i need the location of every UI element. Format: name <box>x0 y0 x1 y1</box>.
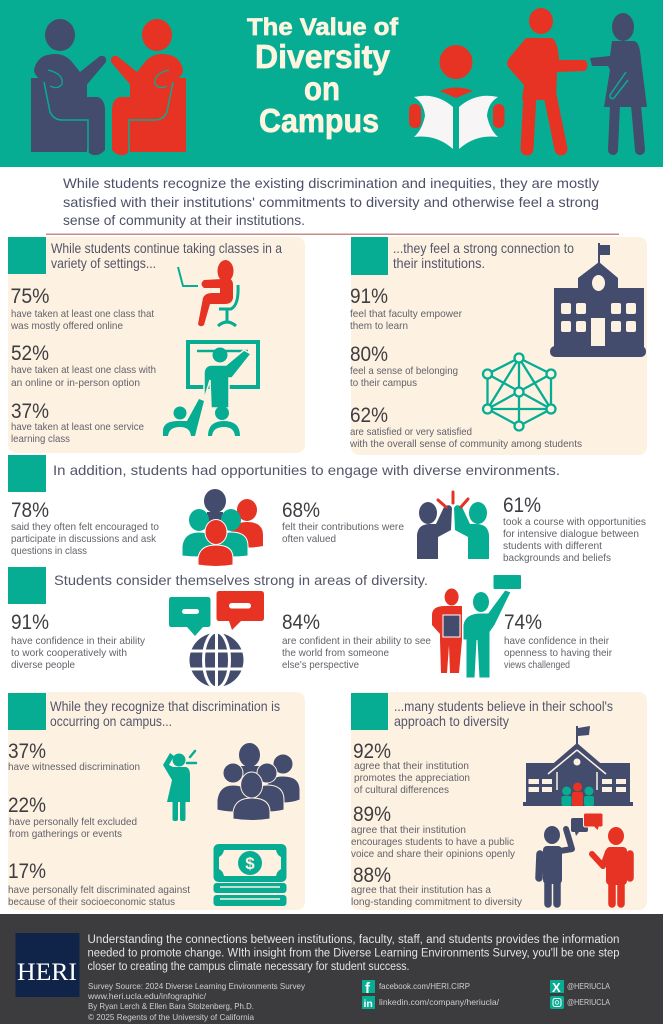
footer message <box>88 934 620 973</box>
intro text <box>63 175 599 228</box>
icon: two seated people talking <box>31 19 186 155</box>
panel heading: their institutions. <box>393 255 485 271</box>
stat: 84% <box>282 611 431 671</box>
stat: 37% <box>8 740 140 773</box>
intro text: While students recognize the existing discrimination and inequities, they are mostly <box>63 175 599 191</box>
source credits <box>87 981 306 1022</box>
stat: 91% <box>350 285 462 332</box>
icon: crowd of people <box>217 742 300 820</box>
stat: 78%: said they often felt encouraged to <box>11 521 159 533</box>
intro text: satisfied with their institutions' commitments to diversity and otherwise feel a strong <box>63 194 599 210</box>
stat: 22%: 22% <box>8 794 46 817</box>
stat: 75%: have taken at least one class that <box>11 308 154 320</box>
stat: 92% <box>353 740 470 796</box>
stat: 62%: are satisfied or very satisfied <box>350 426 472 438</box>
stat: 37% <box>11 400 144 445</box>
panel heading: While students continue taking classes in a <box>51 240 282 256</box>
panel: approach to diversity <box>351 692 647 910</box>
stat: 75% <box>10 285 154 332</box>
icon: woman witnessing <box>163 751 196 821</box>
section heading: Students consider themselves strong in areas of diversity. <box>54 572 428 588</box>
social: linkedin <box>362 996 500 1010</box>
footer message: needed to promote change. WIth insight from the Diverse Learning Environments Survey, you'll be one step <box>88 948 620 960</box>
stat: 74%: have confidence in their <box>504 635 609 647</box>
icon: group of people <box>182 489 263 566</box>
stat: 61% <box>503 494 646 564</box>
icon: stack of money: $ <box>245 854 255 873</box>
stat: 80% <box>350 343 458 389</box>
social: facebook <box>362 980 470 997</box>
stat: 68%: often valued <box>282 533 336 545</box>
icon: speech bubbles and globe <box>169 591 264 688</box>
footer message: closer to creating the campus climate necessary for student success. <box>88 961 410 973</box>
stat: 74%: 74% <box>504 611 542 634</box>
social: X: X <box>552 980 561 995</box>
stat: 89%: encourages students to have a public <box>351 836 514 848</box>
stat: 78%: questions in class <box>11 545 87 557</box>
stat: 17% <box>8 860 190 908</box>
stat: 22%: from gatherings or events <box>9 828 122 840</box>
icon: school with students <box>523 726 633 806</box>
social: facebook: facebook.com/HERI.CIRP <box>379 981 470 991</box>
footer <box>0 914 663 1024</box>
stat: 68% <box>282 499 404 545</box>
social: linkedin: in <box>364 998 373 1010</box>
stat: 89% <box>351 803 516 860</box>
icon: man and woman shaking hands <box>507 8 647 150</box>
icon: two people with sign <box>432 575 521 678</box>
stat: 78% <box>11 499 159 557</box>
stat: 89%: 89% <box>353 803 391 826</box>
stat: 91%: diverse people <box>11 659 75 671</box>
stat: 68%: felt their contributions were <box>282 521 404 533</box>
stat: 61%: backgrounds and beliefs <box>503 552 611 564</box>
panel heading <box>50 698 280 729</box>
stat: 92%: 92% <box>353 740 391 763</box>
panel heading: approach to diversity <box>394 713 509 729</box>
panel heading: While they recognize that discrimination is <box>50 698 280 714</box>
stat: 74%: openness to having their <box>504 647 612 659</box>
stat: 89%: voice and share their opinions openly <box>351 848 516 860</box>
stat: 37%: 37% <box>8 740 46 763</box>
stat: 74% <box>504 611 612 671</box>
stat: 37%: have taken at least one service <box>11 421 144 433</box>
stat: 62%: 62% <box>350 404 388 427</box>
section: strengths in diversity <box>8 567 612 688</box>
section heading: In addition, students had opportunities to engage with diverse environments. <box>53 462 560 478</box>
stat: 62%: with the overall sense of community among students <box>349 438 582 450</box>
stat: 61%: students with different <box>503 540 602 552</box>
stat: 52% <box>11 342 156 389</box>
stat: 78%: 78% <box>11 499 49 522</box>
stat: 91%: feel that faculty empower <box>350 308 462 320</box>
title: Diversity <box>255 38 391 75</box>
stat: 61%: took a course with opportunities <box>503 516 646 528</box>
stat: 84%: are confident in their ability to see <box>282 635 431 647</box>
source credits: © 2025 Regents of the University of California <box>88 1012 254 1022</box>
stat: 78%: participate in discussions and ask <box>11 533 157 545</box>
stat: 75%: was mostly offered online <box>10 320 123 332</box>
panel heading: variety of settings... <box>51 255 156 271</box>
source credits: www.heri.ucla.edu/infographic/ <box>87 991 207 1001</box>
panel heading <box>394 698 613 729</box>
panel heading <box>393 240 574 271</box>
stat: 17%: because of their socioeconomic status <box>8 896 175 908</box>
icon: stack of money <box>214 844 286 906</box>
header banner <box>0 0 663 167</box>
stat: 88%: agree that their institution has a <box>351 884 491 896</box>
stat: 84%: the world from someone <box>282 647 389 659</box>
title <box>247 14 399 139</box>
panel heading: occurring on campus... <box>50 713 172 729</box>
panel: discrimination on campus <box>8 692 305 910</box>
stat: 92%: promotes the appreciation <box>354 772 470 784</box>
stat: 88%: long-standing commitment to diversity <box>351 896 523 908</box>
stat: 80%: to their campus <box>350 377 417 389</box>
logo: HERI: HERI <box>17 959 77 986</box>
stat: 22% <box>8 794 137 840</box>
stat: 61%: 61% <box>503 494 541 517</box>
stat: 17%: 17% <box>8 860 46 883</box>
panel: class settings <box>8 237 305 453</box>
footer message: Understanding the connections between institutions, faculty, staff, and students provides the information <box>88 934 620 946</box>
title: on <box>304 70 340 107</box>
source credits: Survey Source: 2024 Diverse Learning Environments Survey <box>88 981 306 991</box>
icon: teacher at board with students <box>163 342 258 436</box>
social: X <box>550 980 610 995</box>
icon: student on laptop <box>178 260 238 326</box>
section: diverse environments <box>8 455 646 566</box>
title: The Value of <box>247 14 399 41</box>
stat: 17%: have personally felt discriminated against <box>8 884 190 896</box>
source credits: By Ryan Lerch & Ellen Bara Stolzenberg, Ph.D. <box>88 1001 254 1011</box>
social: linkedin: linkedin.com/company/heriucla/ <box>379 997 500 1007</box>
stat: 84%: 84% <box>282 611 320 634</box>
intro text: sense of community at their institutions. <box>63 212 305 228</box>
panel heading <box>51 240 282 271</box>
stat: 89%: agree that their institution <box>351 824 466 836</box>
stat: 74%: views challenged <box>504 659 570 671</box>
icon: two people conversing <box>539 813 630 904</box>
stat: 75%: 75% <box>10 285 50 308</box>
stat: 91%: to work cooperatively with <box>11 647 127 659</box>
stat: 84%: else's perspective <box>282 659 359 671</box>
icon: person reading book <box>409 45 504 149</box>
icon: network <box>483 354 556 430</box>
stat: 37%: learning class <box>11 433 70 445</box>
panel heading: ...they feel a strong connection to <box>393 240 574 256</box>
stat: 91%: 91% <box>350 285 388 308</box>
stat: 91%: have confidence in their ability <box>11 635 146 647</box>
stat: 91%: them to learn <box>350 320 408 332</box>
stat: 52%: have taken at least one class with <box>11 364 156 376</box>
stat: 37%: 37% <box>11 400 49 423</box>
social: instagram: @HERIUCLA <box>567 997 610 1007</box>
stat: 88% <box>351 864 523 908</box>
icon: school building <box>550 243 646 357</box>
social: X: @HERIUCLA <box>567 981 610 991</box>
stat: 62% <box>349 404 582 450</box>
social: facebook: f <box>365 980 371 997</box>
stat: 52%: an online or in-person option <box>11 377 140 389</box>
logo: HERI <box>16 933 80 997</box>
stat: 80%: feel a sense of belonging <box>350 365 458 377</box>
stat: 91%: 91% <box>11 611 49 634</box>
stat: 92%: agree that their institution <box>354 760 469 772</box>
stat: 61%: for intensive dialogue between <box>503 528 639 540</box>
title: Campus <box>259 102 379 139</box>
stat: 92%: of cultural differences <box>354 784 449 796</box>
stat: 88%: 88% <box>353 864 391 887</box>
stat: 80%: 80% <box>350 343 388 366</box>
stat: 91% <box>11 611 146 671</box>
stat: 52%: 52% <box>11 342 49 365</box>
panel heading: ...many students believe in their school's <box>394 698 613 714</box>
social: instagram <box>550 996 610 1009</box>
panel: connection to institutions <box>349 237 647 455</box>
icon: high five <box>417 492 489 559</box>
stat: 37%: have witnessed discrimination <box>8 761 140 773</box>
stat: 68%: 68% <box>282 499 320 522</box>
stat: 22%: have personally felt excluded <box>9 816 137 828</box>
